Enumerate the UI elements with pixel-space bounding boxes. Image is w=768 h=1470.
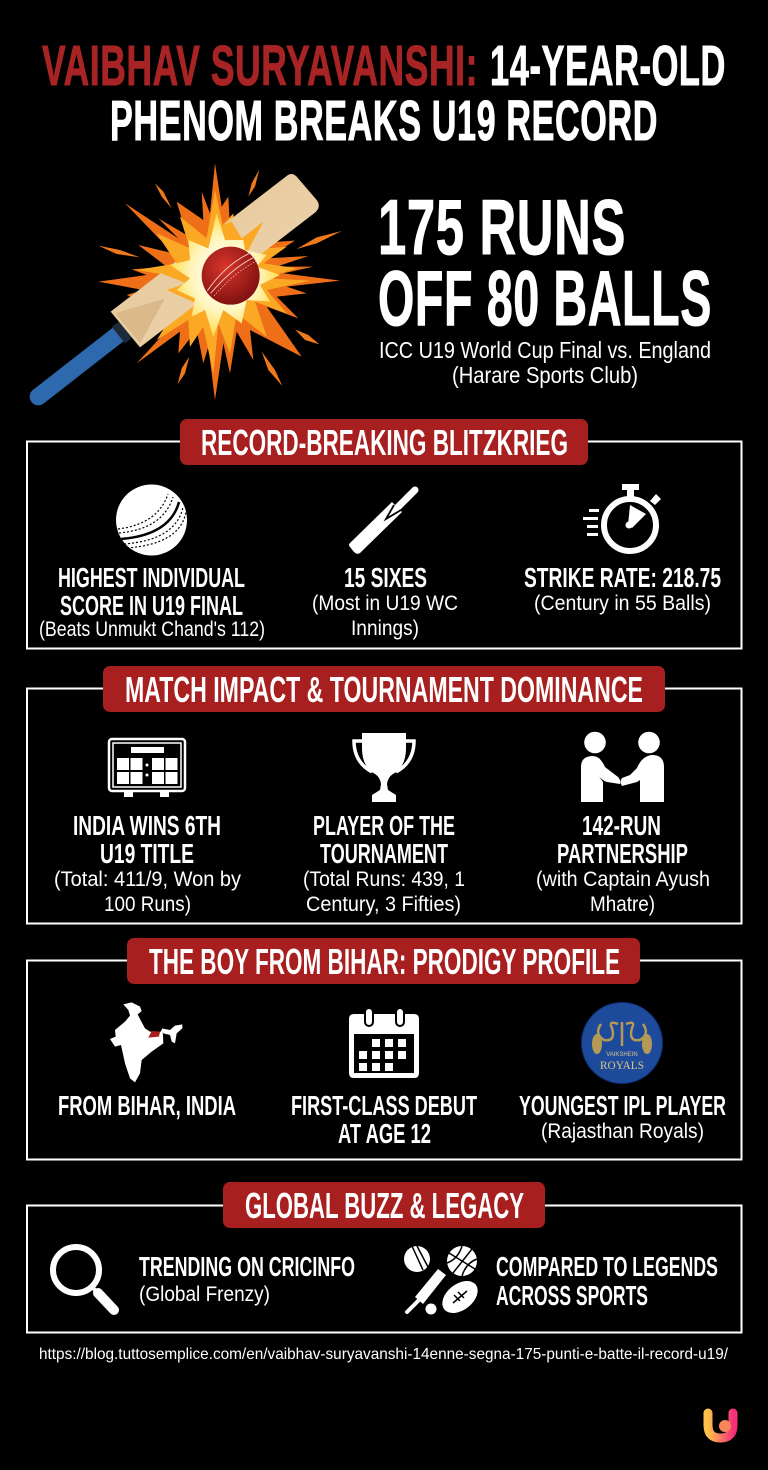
panel: record-breaking blitzkrieg [27, 419, 742, 648]
stat: partnership: PARTNERSHIP [557, 838, 688, 869]
stat: india wins: 100 Runs) [104, 893, 191, 916]
icon: bat [349, 490, 415, 554]
icon: sports balls [404, 1246, 484, 1320]
icon: corner logo [708, 1413, 733, 1438]
stat: first-class debut: AT AGE 12 [338, 1118, 431, 1149]
stat: first-class debut [291, 1090, 477, 1149]
stat: legends: ACROSS SPORTS [496, 1280, 648, 1311]
stat: partnership: 142-RUN [582, 810, 661, 841]
title [42, 34, 726, 153]
stat: partnership [536, 810, 710, 916]
stat: player of the tournament: TOURNAMENT [320, 838, 448, 869]
headline stat: ICC U19 World Cup Final vs. England [379, 337, 711, 363]
stat: from bihar: FROM BIHAR, INDIA [58, 1090, 236, 1121]
headline stat [378, 183, 712, 388]
stat: partnership: Mhatre) [590, 893, 655, 916]
stat: player of the tournament: (Total Runs: 439, 1 [303, 868, 465, 891]
stat: 15 sixes: (Most in U19 WC [312, 592, 458, 615]
stat: india wins [54, 810, 241, 916]
stat: strike rate [524, 562, 721, 615]
stat: highest individual score: (Beats Unmukt Chand's 112) [39, 618, 265, 641]
heading [127, 938, 640, 984]
stat: trending [139, 1251, 355, 1306]
icon: cricket ball [116, 484, 187, 556]
heading [180, 419, 588, 465]
panel: match impact [27, 666, 742, 924]
stat: partnership: (with Captain Ayush [536, 868, 710, 891]
headline stat: 175 RUNS [378, 183, 626, 271]
stat: highest individual score: HIGHEST INDIVIDUAL [58, 562, 245, 593]
stat: legends [496, 1251, 718, 1311]
icon: india map [110, 1002, 182, 1082]
stat: highest individual score: SCORE IN U19 FINAL [60, 590, 243, 621]
icon: handshake [581, 732, 664, 802]
stat: 15 sixes: Innings) [351, 617, 419, 640]
hero illustration: bat hitting ball with explosion [38, 163, 342, 400]
stat: youngest ipl player: (Rajasthan Royals) [541, 1120, 704, 1143]
heading: GLOBAL BUZZ & LEGACY [245, 1185, 524, 1226]
stat: india wins: U19 TITLE [100, 838, 194, 869]
source url: https://blog.tuttosemplice.com/en/vaibhav-suryavanshi-14enne-segna-175-punti-e-batte-il-record-u19/ [39, 1346, 729, 1363]
stat: trending: TRENDING ON CRICINFO [139, 1251, 355, 1282]
icon: royals crest: ROYALS [600, 1058, 644, 1072]
stat: india wins: (Total: 411/9, Won by [54, 868, 241, 891]
ball [202, 247, 260, 305]
icon: stopwatch [583, 484, 661, 551]
icon: scoreboard [109, 739, 185, 797]
icon: calendar [349, 1008, 419, 1078]
cricket bat [38, 174, 319, 397]
icon: royals crest [582, 1002, 662, 1084]
stat: 15 sixes [312, 562, 458, 640]
icon: royals crest: VAIKSHEIN [606, 1052, 638, 1058]
stat: strike rate: (Century in 55 Balls) [534, 592, 711, 615]
title: VAIBHAV SURYAVANSHI: [42, 34, 478, 98]
stat: first-class debut: FIRST-CLASS DEBUT [291, 1090, 477, 1121]
icon: magnifier [53, 1247, 114, 1310]
heading [223, 1182, 545, 1228]
stat: player of the tournament: Century, 3 Fifties) [306, 893, 461, 916]
stat: trending: (Global Frenzy) [139, 1283, 270, 1306]
panel: global buzz [27, 1182, 742, 1332]
stat: highest individual score [39, 562, 265, 641]
panel: prodigy profile [27, 938, 742, 1160]
stat: india wins: INDIA WINS 6TH [73, 810, 221, 841]
headline stat: (Harare Sports Club) [452, 362, 638, 388]
stat: player of the tournament: PLAYER OF THE [313, 810, 455, 841]
stat: youngest ipl player [519, 1090, 726, 1143]
stat: 15 sixes: 15 SIXES [344, 562, 427, 593]
icon: trophy [354, 733, 414, 802]
stat: player of the tournament [303, 810, 465, 916]
